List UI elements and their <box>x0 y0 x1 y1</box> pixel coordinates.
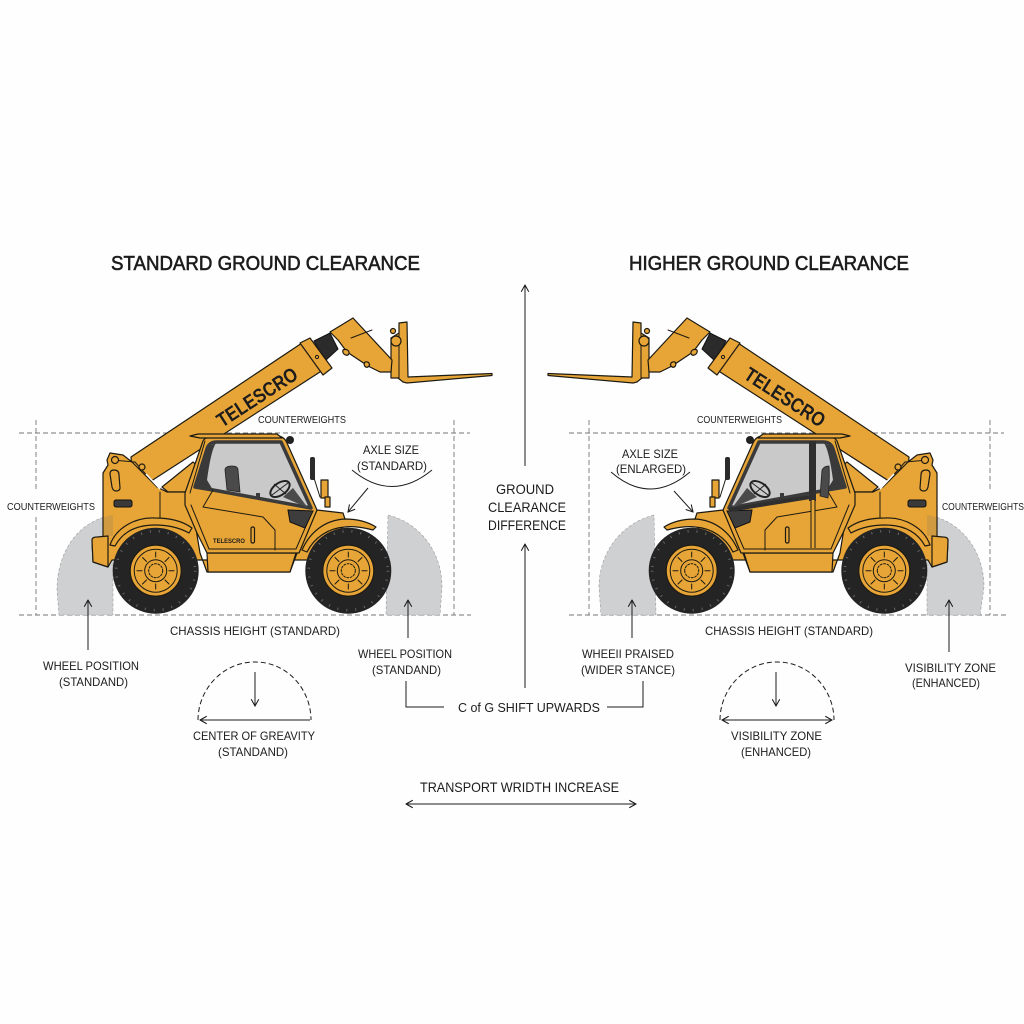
boom <box>131 343 323 485</box>
grey zone tint on rear panel <box>104 515 113 536</box>
label: counterweights side left: COUNTERWEIGHTS <box>7 502 95 513</box>
belly pan <box>207 553 296 572</box>
centre: ground clearance difference: CLEARANCE <box>488 499 566 515</box>
boom brand: left: TELESCRO <box>213 364 302 432</box>
label: chassis height left: CHASSIS HEIGHT (STANDARD) <box>170 624 340 638</box>
cab detail: right seat and door pillar <box>729 441 829 548</box>
boom head <box>330 318 392 372</box>
steering wheel <box>256 478 308 508</box>
reference dashed lines: left panel <box>19 420 471 615</box>
rear lamp <box>110 470 120 491</box>
cab roof plate <box>190 434 282 438</box>
callout: axle size enlarged: AXLE SIZE <box>622 447 678 461</box>
chassis body <box>92 453 346 572</box>
diagram: center of gravity: (STANDAND) <box>218 745 288 759</box>
label: counterweights top right: COUNTERWEIGHTS <box>697 415 782 426</box>
inner boom <box>314 333 338 361</box>
callout: axle size standard: AXLE SIZE <box>363 443 419 457</box>
cab seat: left <box>225 466 240 492</box>
tower linkage <box>112 456 160 489</box>
diagram: visibility zone <box>720 662 834 759</box>
callout: wheel position right of left panel <box>358 600 452 677</box>
dashboard panel <box>288 510 313 528</box>
telehandler: standard clearance <box>92 318 492 614</box>
callout: wheel raised <box>581 600 675 677</box>
centre: ground clearance difference: DIFFERENCE <box>488 517 566 533</box>
callout: axle size enlarged <box>611 447 693 512</box>
transport width increase: TRANSPORT WRIDTH INCREASE <box>420 779 619 795</box>
rear bumper <box>92 536 108 567</box>
callout: wheel raised: (WIDER STANCE) <box>581 663 675 677</box>
engine vent slot <box>114 500 132 507</box>
callout: wheel position right of left panel: WHEEL POSITION <box>358 647 452 661</box>
cab frame <box>185 436 317 553</box>
reference dashed lines: right panel <box>569 420 1007 615</box>
title: higher ground clearance: HIGHER GROUND CLEARANCE <box>629 253 909 275</box>
lift cylinder <box>162 462 198 492</box>
centre: c of g shift <box>406 681 643 715</box>
diagram: center of gravity: CENTER OF GREAVITY <box>193 729 315 743</box>
callout: wheel position left <box>43 600 139 689</box>
callout: visibility zone side: (ENHANCED) <box>912 676 980 690</box>
zone: right front grey zone <box>599 515 656 615</box>
attachment: forks and carriage <box>390 322 492 383</box>
zone: left front grey zone <box>386 515 442 615</box>
beacon <box>286 436 294 444</box>
diagram: visibility zone: (ENHANCED) <box>741 745 811 759</box>
door handle <box>251 527 254 543</box>
fender: rear <box>110 518 192 546</box>
centre: ground clearance difference <box>488 285 566 688</box>
fender: front <box>302 519 376 552</box>
window frame shadow <box>194 443 216 490</box>
zone: right rear grey zone <box>927 515 984 615</box>
callout: axle size standard: (STANDARD) <box>357 459 427 473</box>
door outlines <box>190 441 312 550</box>
callout: visibility zone side: VISIBILITY ZONE <box>905 661 996 675</box>
wheel: rear <box>113 528 199 614</box>
wheel: front <box>305 528 391 614</box>
door brand: TELESCRO <box>213 538 245 545</box>
telehandler: higher clearance (mirrored) <box>548 318 948 614</box>
side mirror <box>310 457 330 507</box>
callout: wheel position right of left panel: (STANDAND) <box>372 663 441 677</box>
callout: visibility zone side <box>905 600 996 690</box>
diagram: center of gravity <box>193 662 315 759</box>
boom brand: right: TELESCRO <box>740 364 829 432</box>
label: counterweights top left: COUNTERWEIGHTS <box>258 415 346 426</box>
centre: c of g shift: C of G SHIFT UPWARDS <box>458 701 600 715</box>
zone: left rear grey zone <box>57 515 113 615</box>
callout: wheel position left: WHEEL POSITION <box>43 659 139 673</box>
boom collar <box>300 338 332 375</box>
label: chassis height right: CHASSIS HEIGHT (STANDARD) <box>705 624 873 638</box>
cab window <box>195 442 311 508</box>
callout: axle size enlarged: (ENLARGED) <box>616 462 686 476</box>
callout: axle size standard <box>348 443 432 512</box>
centre: ground clearance difference: GROUND <box>496 481 554 497</box>
callout: wheel raised: WHEEII PRAISED <box>582 647 674 661</box>
diagram: visibility zone: VISIBILITY ZONE <box>731 729 822 743</box>
title: standard ground clearance: STANDARD GROUND CLEARANCE <box>111 253 420 275</box>
callout: wheel position left: (STANDAND) <box>59 675 128 689</box>
